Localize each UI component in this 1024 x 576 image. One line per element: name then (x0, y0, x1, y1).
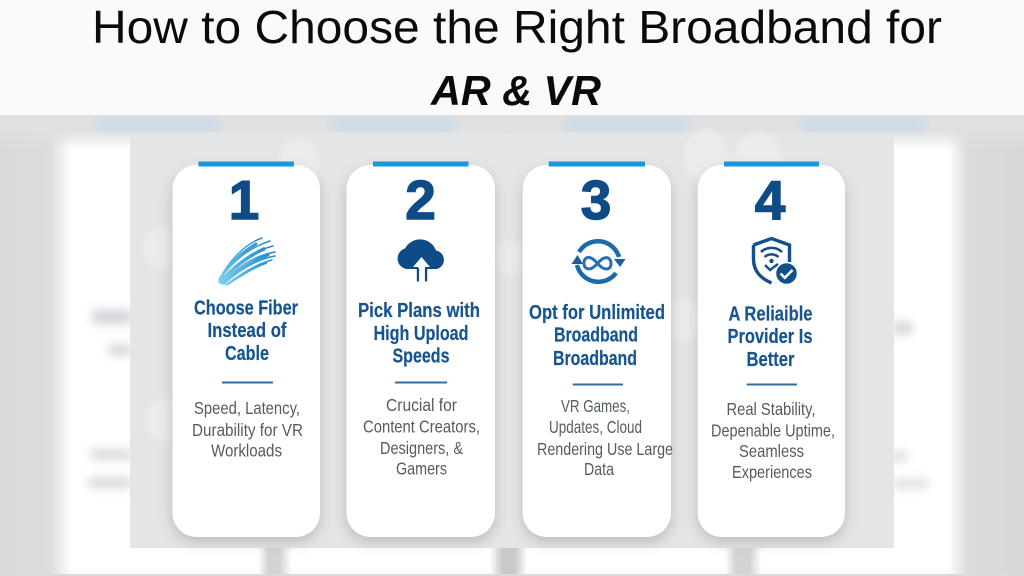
central image panel (130, 129, 894, 548)
card 3 body (537, 396, 673, 479)
card 1: fiber (172, 162, 320, 542)
icon: cloud upload (398, 239, 444, 282)
card 2 heading: Speeds (392, 346, 450, 368)
card 1 top accent (198, 162, 294, 166)
card 3 body: VR Games, (561, 396, 630, 416)
card 3 heading: Opt for Unlimited (529, 302, 665, 324)
card 3 body: Data (584, 459, 614, 479)
card 2 body (363, 395, 480, 478)
card 4 body: Experiences (732, 462, 812, 482)
title line 1: How to Choose the Right Broadband for (92, 1, 942, 53)
card 2 body: Content Creators, (363, 416, 480, 436)
card 4 body: Real Stability, (726, 399, 816, 419)
card 2 heading: Pick Plans with (358, 300, 480, 322)
card 3 body: Updates, Cloud (549, 417, 642, 437)
card 1 heading: Instead of (208, 320, 287, 342)
card 2 body: Crucial for (386, 395, 457, 415)
card 2 heading: High Upload (374, 323, 468, 345)
card 1 number: 1 (229, 169, 259, 231)
card 2 body: Designers, & (380, 438, 463, 458)
card 3 divider (573, 384, 623, 386)
card 4 heading: Provider Is (728, 326, 812, 348)
card 4 heading (728, 304, 812, 371)
icon: infinity cycle (572, 241, 626, 282)
card 4 heading: A Reliaible (728, 304, 812, 326)
card 4: reliable provider (698, 162, 845, 542)
card 1 body (192, 398, 303, 460)
title banner (0, 0, 1024, 115)
card 1 divider (222, 382, 273, 384)
icon: fiber optic strands (219, 238, 275, 285)
card 4 number: 4 (755, 169, 786, 231)
card 4 body (711, 399, 835, 482)
card 3 heading (529, 302, 665, 370)
card 1 body: Speed, Latency, (194, 398, 300, 418)
card 4 heading: Better (746, 349, 795, 371)
card 3 heading: Broadband (553, 348, 637, 370)
card 2 number: 2 (405, 169, 436, 231)
card 1 heading (194, 298, 298, 365)
card 3 number: 3 (581, 169, 611, 231)
card 4 top accent (724, 162, 819, 166)
card 3 body: Rendering Use Large (537, 439, 673, 459)
card 4 body: Seamless (739, 441, 804, 461)
card 2: upload (346, 162, 495, 542)
card 3 heading: Broadband (554, 325, 638, 347)
card 2 divider (395, 382, 447, 384)
card 2 top accent (373, 162, 468, 166)
card 4 divider (747, 384, 797, 386)
title line 2: AR & VR (430, 67, 602, 114)
card 3 top accent (549, 162, 645, 166)
card 1 heading: Choose Fiber (194, 298, 298, 320)
card 4 body: Depenable Uptime, (711, 420, 835, 440)
card 2 heading (358, 300, 480, 368)
icon: shield with wifi and check (754, 238, 798, 284)
card 1 body: Durability for VR (192, 420, 303, 440)
card 2 body: Gamers (396, 458, 447, 478)
card 1 body: Workloads (211, 440, 282, 460)
card 1 heading: Cable (225, 343, 269, 365)
card 3: unlimited (523, 162, 673, 542)
